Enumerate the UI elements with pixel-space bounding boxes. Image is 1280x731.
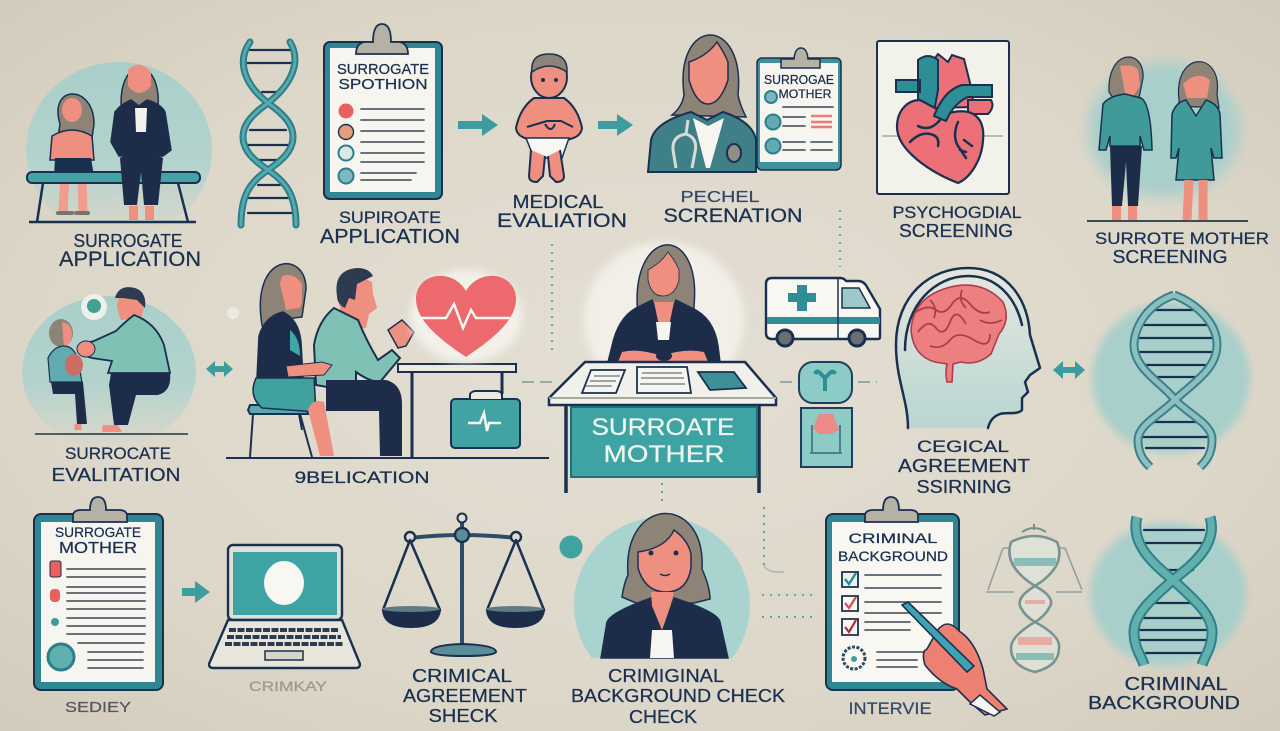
panel: dna criminal background right (1088, 517, 1246, 713)
arrow (206, 361, 233, 377)
panel: couple at desk with heart: 9BELICATION (294, 468, 430, 487)
icon: woman seated (111, 64, 171, 220)
icon: hand with pen (902, 602, 1007, 716)
panel: central surrogate mother desk: MOTHER (604, 441, 724, 468)
panel: surrogate application top left: APPLICATION (59, 248, 201, 271)
panel: surrogate mother screening: SCREENING (1112, 247, 1228, 267)
panel: scales criminal agreement check (382, 514, 545, 726)
panel: baby medical evaluation: MEDICAL (512, 192, 604, 212)
icon: bench (27, 172, 200, 222)
panel: laptop (209, 545, 360, 694)
panel: surrogate evaluation left: EVALITATION (52, 465, 180, 485)
arrow (182, 581, 210, 603)
panel: clipboard application: SPOTHION (338, 76, 428, 93)
panel: scales criminal agreement check: CRIMICAL (412, 666, 512, 686)
panel: baby medical evaluation (497, 54, 627, 232)
panel: couple at desk with heart (226, 264, 549, 487)
clipboard: SURROGAE (764, 72, 834, 87)
icon: child (50, 94, 94, 213)
panel: criminal background clipboard: BACKGROUND (838, 548, 948, 564)
icon: clip (356, 24, 408, 54)
icon: hourglass dna (986, 524, 1082, 672)
panel: woman portrait criminal background check: CRIMIGINAL (608, 666, 724, 686)
icon: woman right (1171, 62, 1222, 220)
panel: clipboard surrogate mother bottom left: SURROGATE (55, 524, 141, 540)
panel: brain head cemical agreement: SSIRNING (916, 477, 1012, 497)
panel: criminal background clipboard (826, 497, 1007, 718)
panel: scales criminal agreement check: SHECK (428, 706, 498, 726)
panel: criminal background clipboard: INTERVIE (848, 699, 932, 718)
panel: surrogate application top left (26, 62, 212, 271)
icon: table (398, 364, 516, 458)
clipboard (757, 48, 841, 170)
icon: medical bag (451, 391, 520, 448)
panel: dna criminal background right: BACKGROUND (1088, 693, 1240, 713)
panel: surrogate mother screening (1087, 57, 1269, 267)
panel: surrogate mother screening: SURROTE MOTHER (1095, 229, 1269, 248)
panel: doctor with clipboard: PECHEL (680, 189, 760, 206)
panel: clipboard application: APPLICATION (320, 226, 460, 248)
panel: clipboard application (320, 24, 460, 248)
panel: central surrogate mother desk: SURROATE (592, 414, 734, 441)
icon: small medical cards (799, 362, 852, 467)
icon: small teal seal (560, 536, 582, 558)
panel: psychological screening heart: PSYCHOGDIAL (892, 203, 1022, 222)
panel: clipboard surrogate mother bottom left (34, 497, 163, 716)
clipboard: MOTHER (778, 87, 832, 101)
panel: laptop: CRIMKAY (249, 678, 328, 694)
icon: woman (601, 513, 728, 658)
connector lines (522, 210, 877, 617)
panel: doctor with clipboard (648, 35, 841, 227)
panel: baby medical evaluation: EVALIATION (497, 211, 627, 232)
icon: man (77, 287, 170, 432)
panel: woman portrait criminal background check (571, 513, 785, 727)
panel: brain head cemical agreement (896, 268, 1040, 497)
icon: heart with pulse (410, 270, 522, 362)
arrow (598, 114, 633, 136)
icon: woman at desk (608, 245, 720, 362)
panel: brain head cemical agreement: AGREEMENT (898, 456, 1030, 476)
icon: desk (549, 362, 776, 493)
panel: woman portrait criminal background check: CHECK (629, 707, 697, 727)
panel: criminal background clipboard: CRIMINAL (848, 530, 938, 546)
label: SURROGATE (74, 231, 182, 251)
icon: woman (253, 264, 334, 456)
panel: clipboard surrogate mother bottom left: MOTHER (59, 540, 137, 557)
arrow (1053, 361, 1085, 379)
icon: ambulance (766, 278, 880, 346)
panel: surrogate evaluation left (22, 287, 196, 485)
icon: man (314, 268, 414, 456)
panel: surrogate evaluation left: SURROCATE (65, 444, 171, 463)
icon: clip (73, 497, 127, 522)
panel: psychological screening heart (877, 41, 1022, 241)
panel: woman portrait criminal background check: BACKGROUND CHECK (571, 686, 785, 706)
panel: brain head cemical agreement: CEGICAL (917, 437, 1009, 456)
panel: scales criminal agreement check: AGREEMENT (403, 686, 527, 706)
panel: clipboard application: SURROGATE (337, 61, 429, 78)
panel: dna criminal background right: CRIMINAL (1124, 674, 1228, 694)
icon: child (48, 319, 87, 430)
icon: chair (248, 405, 312, 457)
panel: dna in circle right (1092, 295, 1250, 467)
icon: woman left (1099, 57, 1152, 220)
icon: clip (865, 497, 918, 522)
arrow (458, 114, 498, 136)
panel: psychological screening heart: SCREENING (899, 221, 1013, 241)
label: SUPIROATE (339, 208, 441, 227)
panel: doctor with clipboard: SCRENATION (664, 206, 802, 227)
panel: clipboard surrogate mother bottom left: SEDIEY (65, 699, 131, 716)
panel: central surrogate mother desk (549, 242, 776, 493)
icon: dna helix top (241, 42, 296, 225)
